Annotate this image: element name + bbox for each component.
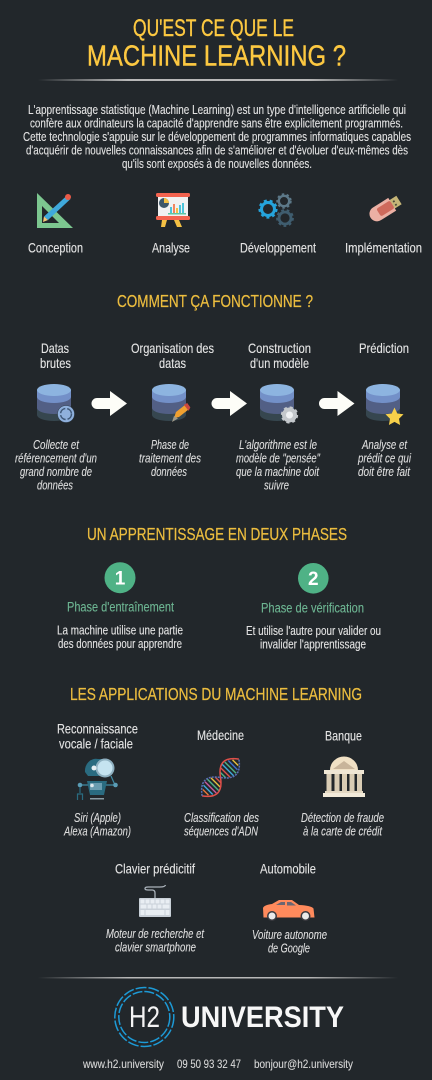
title: QU'EST CE QUE LE: [133, 15, 294, 42]
panel: phase 1: Phase d'entraînement: [67, 600, 174, 614]
contact details: [82, 1057, 353, 1071]
icon: usb key: [367, 194, 403, 224]
application: bank: [301, 728, 384, 838]
panel: phase 1: 1: [115, 568, 126, 590]
application: medicine: Médecine: [197, 727, 244, 743]
icon: car: [263, 900, 314, 921]
step 3: model: Construction: [248, 340, 311, 356]
logo: h2 university: [115, 988, 344, 1046]
label: conception: Conception: [28, 240, 83, 256]
panel: applications: [57, 720, 384, 956]
heading: comment ca fonctionne: COMMENT ÇA FONCTIONNE ?: [117, 291, 313, 311]
icon: gears: [259, 194, 293, 226]
icon: keyboard: [139, 885, 171, 917]
panel: phase 2: Phase de vérification: [261, 600, 364, 616]
step 3: model: d'un modèle: [250, 355, 309, 371]
logo: h2 university: H2: [129, 1001, 160, 1034]
arrow 3: [319, 391, 354, 416]
title: [87, 15, 346, 72]
application: automobile: de Google: [268, 942, 310, 956]
contact details: 09 50 93 32 47: [177, 1057, 241, 1071]
panel: phase 1: des données pour apprendre: [58, 637, 182, 651]
heading: deux phases: UN APPRENTISSAGE EN DEUX PHASES: [87, 524, 347, 544]
panel: phase 2: invalider l'apprentissage: [260, 638, 366, 652]
step 3: model: [236, 340, 320, 492]
step 1: raw data: [15, 340, 97, 492]
intro paragraph: [23, 103, 411, 171]
panel: phase 1: [57, 562, 183, 651]
application: medicine: [184, 727, 260, 838]
application: predictive keyboard: Clavier prédicitif: [115, 861, 195, 877]
application: predictive keyboard: [106, 861, 204, 954]
heading: applications: LES APPLICATIONS DU MACHINE LEARNING: [70, 684, 362, 704]
label: développement: Développement: [240, 240, 316, 256]
arrow 2: [212, 391, 247, 416]
step 2: organisation: datas: [159, 355, 186, 371]
application: medicine: séquences d'ADN: [184, 824, 259, 838]
icon: bank building: [323, 756, 365, 797]
step 4: prediction: prédit ce qui: [357, 452, 412, 466]
step 1: raw data: données: [37, 478, 74, 492]
step 2: organisation: données: [151, 465, 188, 479]
step 4: prediction: doit être fait: [358, 465, 410, 479]
application: voice recognition: [57, 720, 138, 838]
contact details: www.h2.university: [82, 1057, 164, 1071]
panel: phase 2: [246, 563, 381, 652]
step 4: prediction: Prédiction: [359, 340, 409, 356]
icon: robot: [78, 758, 118, 800]
application: bank: Détection de fraude: [301, 811, 384, 825]
step 4: prediction: [357, 340, 412, 479]
application: automobile: Automobile: [260, 861, 316, 877]
step 2: organisation: [131, 340, 214, 479]
application: bank: Banque: [325, 728, 362, 744]
step 2: organisation: Phase de: [151, 438, 189, 452]
panel: four stages: [28, 193, 422, 256]
step 3: model: L'algorithme est le: [239, 438, 317, 452]
panel: phase 2: 2: [308, 569, 319, 590]
application: voice recognition: Reconnaissance: [57, 720, 138, 736]
step 4: prediction: Analyse et: [361, 438, 407, 452]
intro paragraph: qu'ils sont exposés à de nouvelles données.: [122, 157, 312, 171]
icon: set square and pencil: [37, 193, 73, 228]
panel: process steps: [15, 340, 412, 492]
application: predictive keyboard: clavier smartphone: [115, 940, 196, 954]
application: voice recognition: vocale / faciale: [59, 735, 133, 751]
step 3: model: suivre: [264, 478, 289, 492]
logo: h2 university: UNIVERSITY: [181, 1001, 344, 1034]
label: analyse: Analyse: [152, 240, 190, 256]
arrow 1: [92, 391, 127, 416]
step 1: raw data: référencement d'un: [15, 452, 97, 466]
application: automobile: [252, 861, 327, 956]
application: automobile: Voiture autonome: [252, 928, 327, 942]
step 2: organisation: Organisation des: [131, 340, 214, 356]
title: MACHINE LEARNING ?: [87, 40, 346, 72]
step 1: raw data: Datas: [41, 340, 69, 356]
application: voice recognition: Alexa (Amazon): [63, 824, 131, 838]
application: voice recognition: Siri (Apple): [74, 811, 121, 825]
contact details: bonjour@h2.university: [254, 1057, 353, 1071]
step 1: raw data: brutes: [40, 355, 71, 371]
application: predictive keyboard: Moteur de recherche et: [106, 927, 204, 941]
step 2: organisation: traitement des: [139, 452, 202, 466]
application: medicine: Classification des: [184, 811, 260, 825]
step 1: raw data: Collecte et: [33, 438, 79, 452]
step 3: model: que la machine doit: [236, 465, 319, 479]
step 3: model: modèle de "pensée": [236, 452, 320, 466]
step 1: raw data: grand nombre de: [20, 465, 92, 479]
application: bank: à la carte de crédit: [303, 824, 382, 838]
panel: phase 2: Et utilise l'autre pour valider ou: [246, 624, 381, 638]
panel: phase 1: La machine utilise une partie: [57, 624, 183, 638]
icon: presentation board: [156, 193, 190, 227]
icon: dna helix: [196, 753, 245, 802]
